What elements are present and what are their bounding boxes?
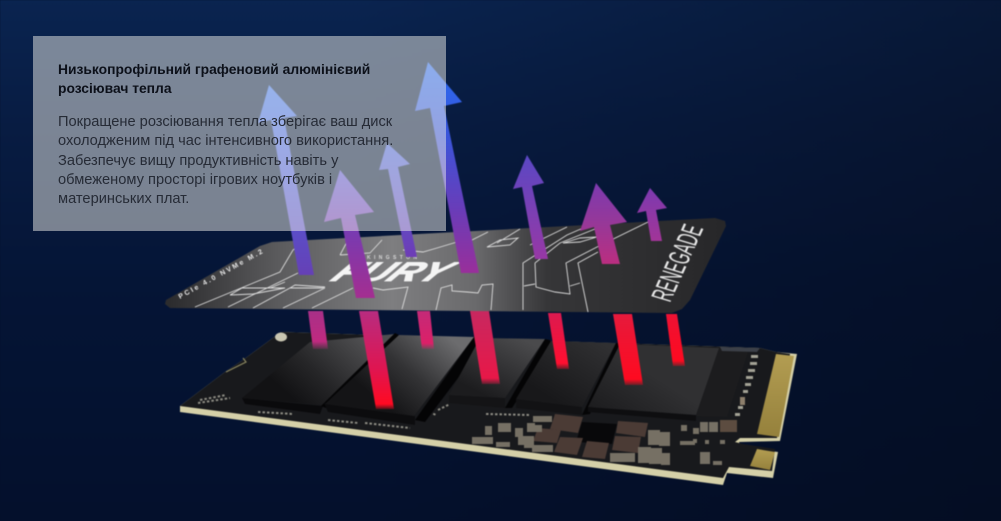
- logo: Kingston FURY: FURY: [324, 257, 466, 287]
- grey label strip on board top: [720, 347, 760, 352]
- upper heat arrows rising through sheet: [258, 62, 667, 298]
- heading: розсіювач тепла: [58, 80, 172, 96]
- sheet surface: [165, 218, 726, 313]
- flash chip 4: [516, 341, 616, 415]
- arrow 3: [379, 143, 417, 257]
- arrow 5: [513, 155, 548, 259]
- flash chip 2: [324, 335, 474, 425]
- chip separator 3: [505, 339, 552, 408]
- panel: feature description: [33, 36, 446, 231]
- small parts rows: [198, 395, 530, 428]
- M.2 circuit board: [180, 332, 797, 485]
- text block: материнських плат.: [58, 191, 189, 207]
- arrow 6: [580, 183, 627, 264]
- text block: обмеженому просторі ігрових ноутбуків і: [58, 172, 332, 188]
- logo: Kingston FURY: KINGSTON: [367, 255, 417, 261]
- capacitors and small parts: [472, 416, 737, 465]
- flash chip 1: [242, 334, 395, 414]
- dark strip beside controller: [696, 348, 748, 417]
- text block: Забезпечує вищу продуктивність навіть у: [58, 153, 338, 169]
- heading: [58, 61, 370, 96]
- logo: Kingston FURY: [324, 255, 466, 287]
- arrow 7: [637, 188, 667, 241]
- arrow 2: [324, 170, 375, 298]
- arrow 1: [258, 85, 314, 275]
- flash chip 3: [449, 338, 545, 408]
- very dark controller shadow: [576, 422, 617, 444]
- chip separator 4: [582, 343, 619, 415]
- mounting notch screw: [275, 332, 287, 342]
- gold connector fingers: [750, 354, 794, 470]
- graphene heat spreader sheet: [165, 218, 726, 313]
- arrow 4: [415, 62, 479, 273]
- lower heat arrow shafts: [308, 311, 685, 409]
- heading: Низькопрофільний графеновий алюмінієвий: [58, 61, 370, 77]
- board edge: [180, 332, 797, 485]
- left edge notch highlight: [226, 358, 246, 372]
- side components: [735, 355, 758, 416]
- logo: Renegade: RENEGADE: [646, 221, 710, 305]
- controller chip 5: [588, 344, 719, 421]
- chip separator 1: [321, 333, 399, 408]
- chip separator 2: [415, 337, 482, 422]
- circuit line pattern: [195, 222, 648, 312]
- text block: охолодженим під час інтенсивного використання.: [58, 133, 393, 149]
- brown inductors: [533, 414, 648, 459]
- text block: [58, 114, 393, 207]
- text block: Покращене розсіювання тепла зберігає ваш диск: [58, 114, 392, 130]
- text: PCIe label: PCIe 4.0 NVMe M.2: [178, 249, 264, 301]
- board surface: [180, 332, 790, 478]
